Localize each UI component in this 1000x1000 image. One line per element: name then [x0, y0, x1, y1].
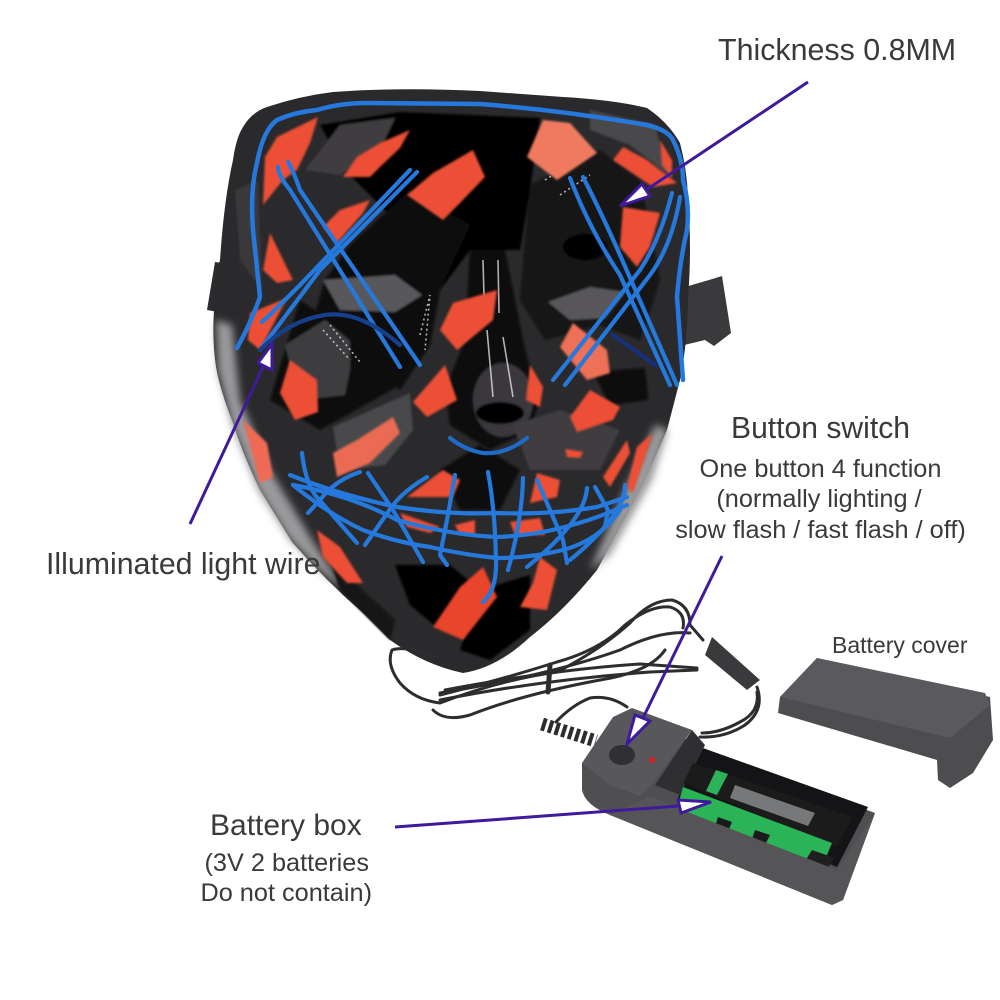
front wall [610, 796, 875, 905]
red LED [649, 757, 655, 763]
mask gloss and shading [235, 110, 668, 660]
text: button functions [675, 455, 966, 544]
label: battery cover: Battery cover [832, 632, 968, 658]
wire connector [705, 637, 760, 690]
battery box [582, 708, 875, 905]
arrow: thickness [620, 82, 808, 206]
label: battery box: Battery box [210, 809, 362, 842]
battery compartment [677, 747, 868, 867]
text: battery note: Do not contain) [200, 879, 372, 907]
text: battery note [200, 849, 372, 907]
arrow: battery box [395, 800, 711, 827]
connecting cable [390, 600, 759, 737]
label: thickness: Thickness 0.8MM [718, 33, 956, 67]
text: button functions: (normally lighting / [716, 485, 923, 513]
battery cover [778, 658, 993, 788]
label: button switch: Button switch [731, 412, 910, 445]
battery one [683, 763, 853, 847]
arrow: button switch [627, 556, 722, 744]
push button [609, 745, 635, 765]
arrow: illuminated wire [190, 344, 272, 524]
illuminated blue light wire [237, 103, 688, 602]
glossy highlights [323, 155, 590, 397]
battery two [677, 787, 832, 867]
text: battery note: (3V 2 batteries [204, 849, 369, 877]
label: illuminated light wire: Illuminated light wire [46, 548, 320, 581]
pale mask edges [216, 320, 668, 590]
orange-red paint patches [243, 117, 677, 640]
text: button functions: slow flash / fast flash / off) [675, 516, 966, 544]
elastic strap [207, 262, 731, 346]
mask body [213, 89, 690, 673]
strain relief [542, 724, 596, 741]
text: button functions: One button 4 function [700, 455, 941, 483]
